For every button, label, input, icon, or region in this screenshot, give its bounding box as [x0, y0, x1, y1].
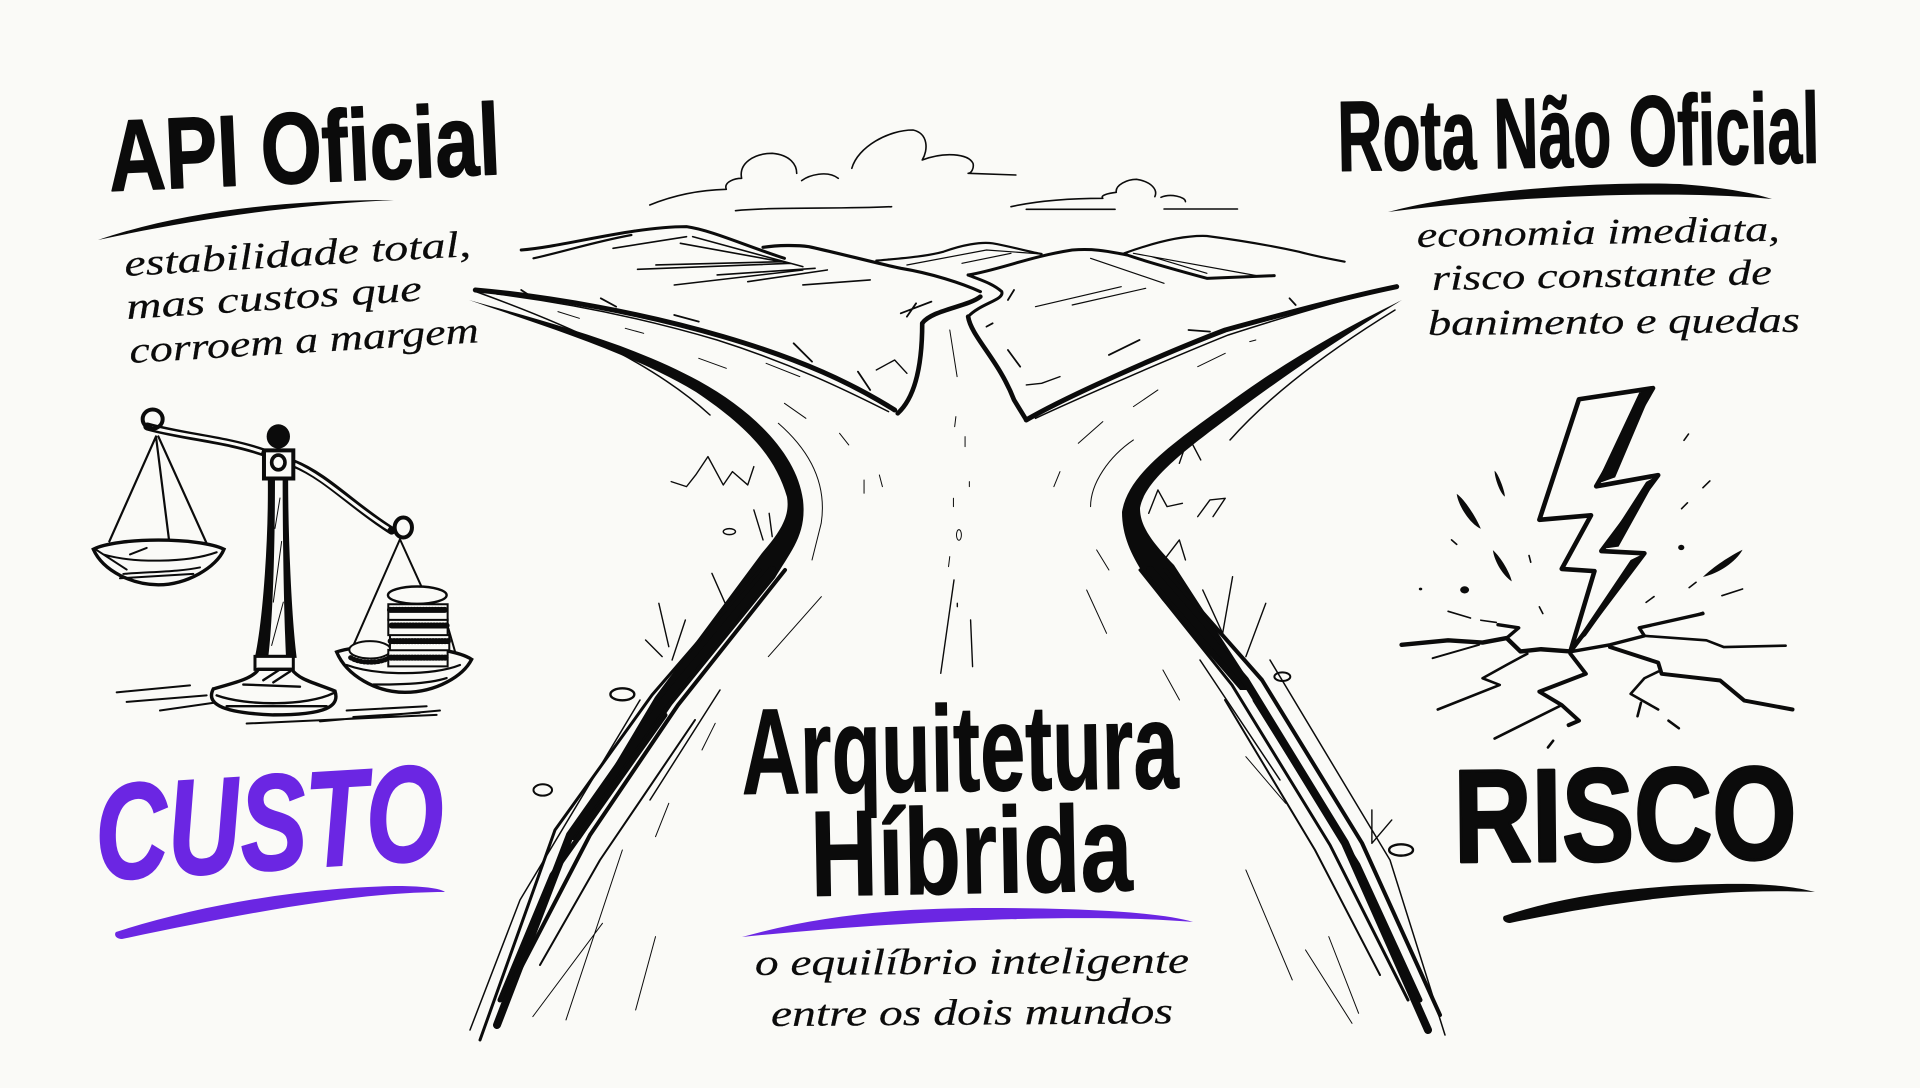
icon: clouds: [650, 130, 1237, 211]
beam: [147, 426, 392, 531]
panel: Arquitetura Híbrida: [740, 678, 1193, 1035]
subtitle text: o equilíbrio inteligente: [755, 941, 1189, 984]
meadow edges of the fork: [475, 275, 1397, 420]
label: RISCO: RISCO: [1453, 739, 1797, 890]
CUSTO underline: [115, 886, 445, 939]
heading underline: [1388, 183, 1772, 212]
icon: balance scale with coins: [93, 410, 472, 724]
grass: [646, 573, 725, 660]
left pan: [93, 540, 224, 585]
base: [255, 656, 293, 669]
subtitle text: corroem a margem: [128, 310, 480, 372]
heading: Arquitetura Híbrida: Arquitetura: [740, 678, 1180, 820]
flat coin: [349, 641, 391, 659]
subtitle text: risco constante de: [1431, 252, 1772, 298]
right strings: [353, 539, 458, 663]
subtitle text: [755, 941, 1189, 1035]
subtitle text: [1416, 209, 1800, 343]
centre line dashes: [941, 580, 973, 673]
subtitle text: entre os dois mundos: [771, 991, 1173, 1035]
road centre dashes: [558, 312, 1256, 570]
illustration: right road edge: [1122, 300, 1445, 1035]
label: CUSTO: CUSTO: [90, 736, 448, 909]
icon: lightning bolt and ground crack: [1402, 388, 1792, 747]
heading: Arquitetura Híbrida: Híbrida: [809, 780, 1134, 922]
debris sparks: [1419, 471, 1743, 593]
subtitle text: estabilidade total,: [123, 224, 472, 285]
left strings: [109, 436, 212, 561]
RISCO underline: [1503, 884, 1815, 923]
lower road details: [533, 573, 1413, 1023]
purple underline: [742, 908, 1193, 937]
lightning bolt: [1539, 388, 1658, 651]
hills: [521, 227, 1345, 307]
coin stack: [388, 587, 449, 666]
illustration: left road edge: [469, 292, 804, 1040]
heading underline: [98, 200, 394, 240]
scale shadow strokes: [117, 685, 440, 724]
heading: Arquitetura Híbrida: [740, 678, 1180, 922]
right pan: [337, 646, 472, 692]
column: [257, 479, 295, 656]
panel: Rota Não Oficial: [1336, 73, 1820, 923]
knob and pivot: [267, 424, 290, 449]
subtitle text: economia imediata,: [1416, 209, 1780, 255]
heading: API Oficial: API Oficial: [106, 84, 503, 213]
ground crack: [1402, 614, 1792, 747]
grass tufts along road: [671, 360, 1225, 560]
panel: API Oficial: [90, 84, 503, 939]
illustration: landscape with clouds and hills: [475, 130, 1397, 570]
subtitle text: banimento e quedas: [1428, 300, 1800, 343]
subtitle text: mas custos que: [125, 268, 423, 328]
subtitle text: [123, 224, 480, 372]
